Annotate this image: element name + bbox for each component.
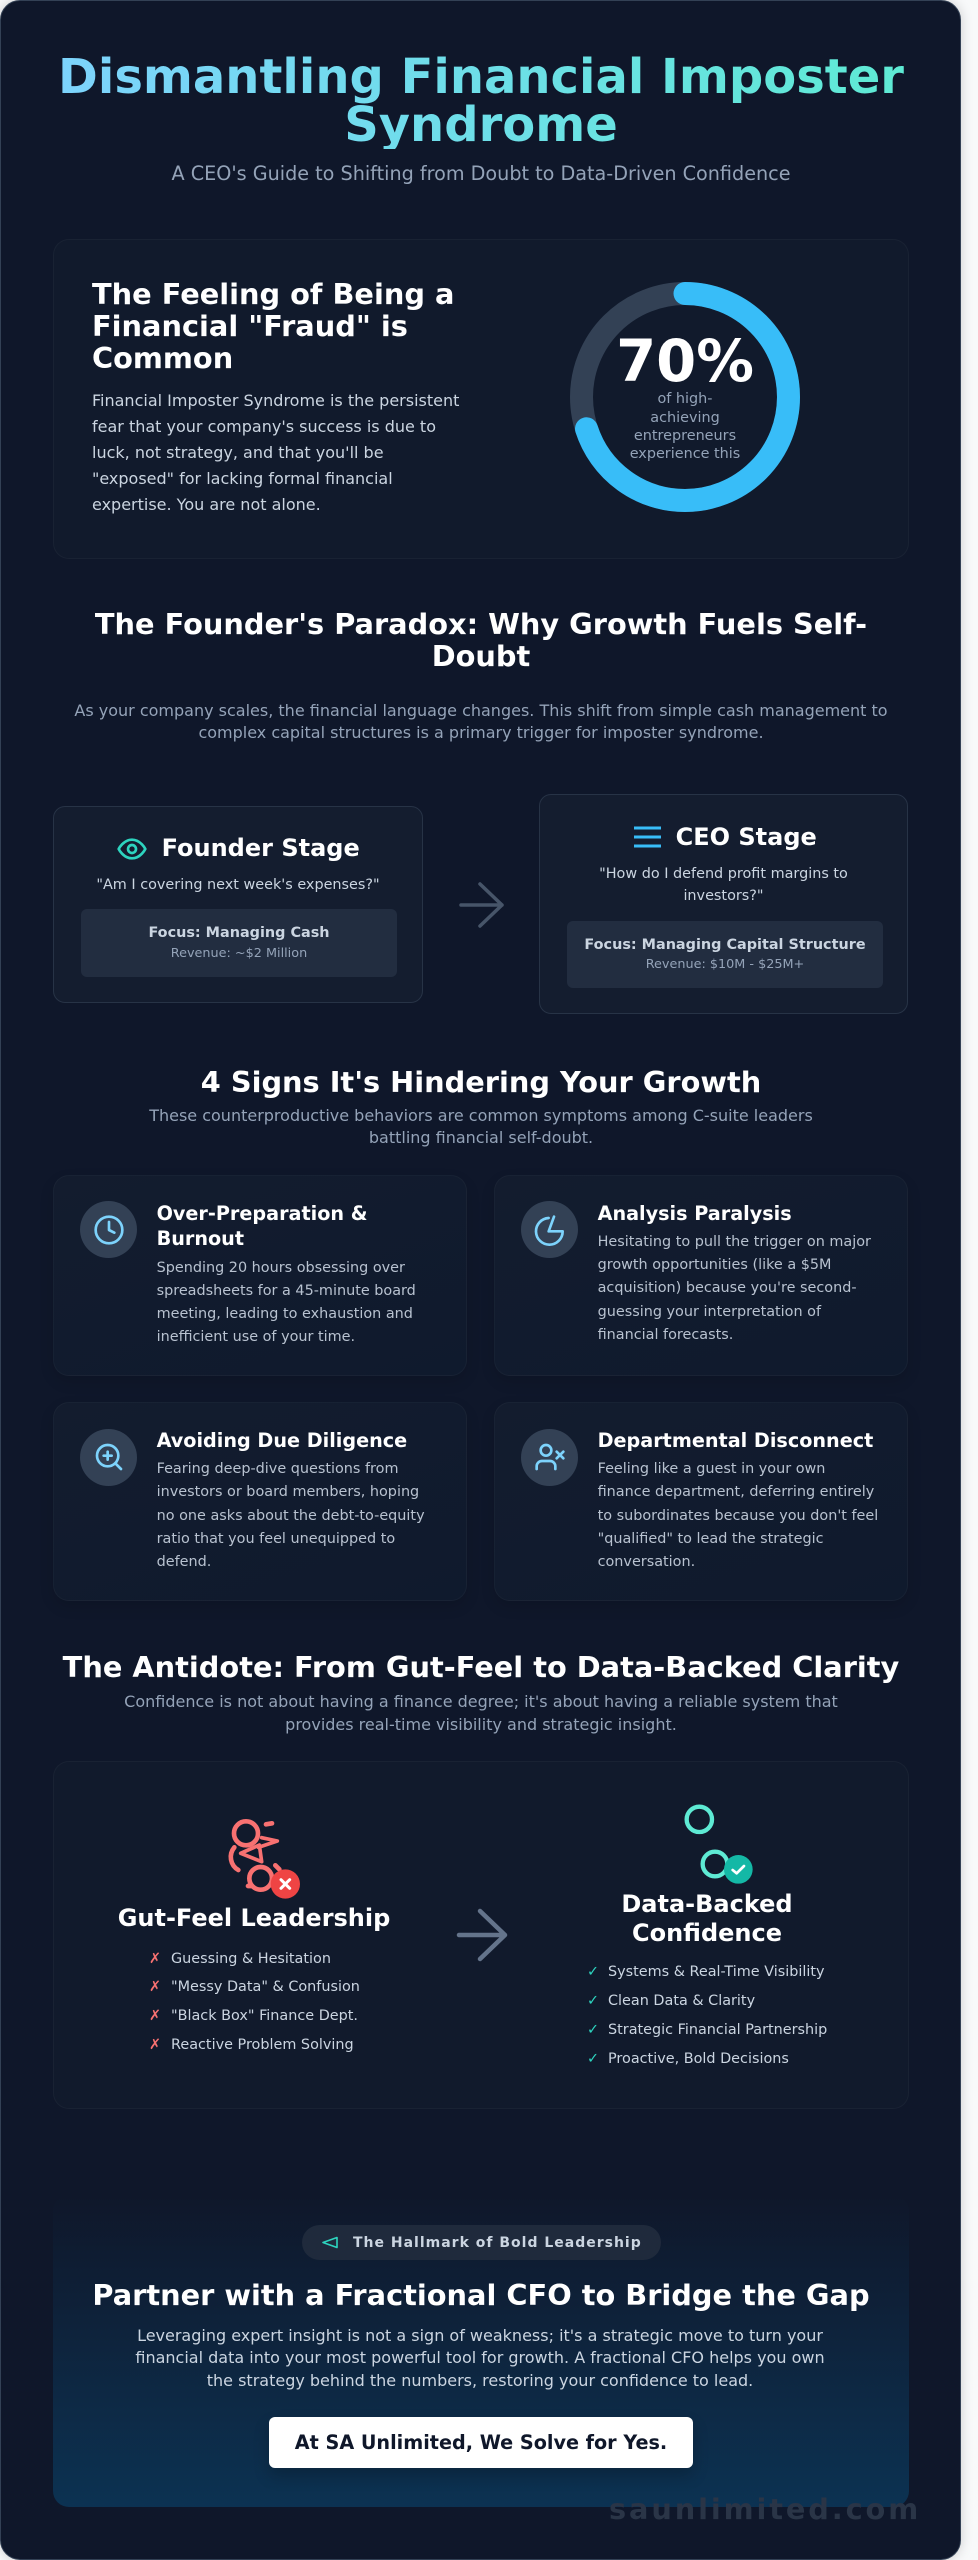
cta text: financial data into your most powerful tool for growth. A fractional CFO helps you own (135, 2348, 825, 2367)
badge (302, 2225, 661, 2260)
card title: Analysis Paralysis (598, 1202, 792, 1225)
card title (157, 1202, 368, 1250)
cta heading: Partner with a Fractional CFO to Bridge the Gap (92, 2278, 870, 2312)
card text (157, 1461, 425, 1570)
icon: eye (117, 838, 147, 860)
title (53, 53, 909, 149)
heading: the founder's paradox: The Founder's Paradox: Why Growth Fuels Self- (95, 607, 867, 641)
card text: growth opportunities (like a $5M (598, 1257, 831, 1273)
watermark: saunlimited.com (609, 2492, 921, 2526)
data-backed list: Systems & Real-Time Visibility (608, 1964, 825, 1980)
section intro: paradox: As your company scales, the financial language changes. This shift from simple cash management to (74, 701, 888, 720)
description text: Financial Imposter Syndrome is the persistent (92, 391, 459, 410)
card text: ratio that you feel unequipped to (157, 1531, 395, 1547)
card text (598, 1461, 878, 1570)
section intro: antidote: Confidence is not about having a finance degree; it's about having a reliable system that (124, 1692, 838, 1711)
heading: Financial "Fraud" is (92, 309, 408, 343)
card text: Feeling like a guest in your own (598, 1461, 825, 1477)
panel: founder stage (53, 806, 423, 1003)
cta text: Leveraging expert insight is not a sign of weakness; it's a strategic move to turn your (137, 2326, 823, 2345)
focus label: Focus: Managing Cash (148, 925, 330, 941)
description text: "exposed" for lacking formal financial (92, 469, 393, 488)
focus label: Focus: Managing Capital Structure (584, 937, 866, 953)
cta text (135, 2326, 825, 2390)
stat caption: of high- (657, 391, 712, 407)
ceo quote: investors?" (683, 888, 764, 904)
section intro: paradox (74, 701, 888, 742)
card text (157, 1260, 416, 1345)
heading: the antidote: The Antidote: From Gut-Feel to Data-Backed Clarity (63, 1650, 899, 1684)
card text (598, 1234, 871, 1343)
gut-feel list: Reactive Problem Solving (171, 2037, 354, 2053)
description text (92, 391, 459, 514)
card text: defend. (157, 1554, 211, 1570)
card text: finance department, deferring entirely (598, 1484, 874, 1500)
gut-feel list: Guessing & Hesitation (171, 1951, 331, 1967)
gut-feel list: "Black Box" Finance Dept. (171, 2008, 358, 2024)
card text: guessing your interpretation of (598, 1304, 821, 1320)
gut-feel heading: Gut-Feel Leadership (118, 1904, 390, 1932)
section intro: paradox: complex capital structures is a primary trigger for imposter syndrome. (198, 723, 764, 742)
card title: Avoiding Due Diligence (157, 1429, 407, 1452)
card text: to subordinates because you don't feel (598, 1508, 878, 1524)
stage name: CEO Stage (676, 823, 817, 851)
card text: inefficient use of your time. (157, 1329, 355, 1345)
cta button (269, 2417, 693, 2468)
heading: Common (92, 341, 233, 375)
panel: comparison (53, 1761, 909, 2109)
panel: ceo stage (539, 794, 908, 1014)
revenue label: Revenue: $10M - $25M+ (646, 957, 804, 972)
gut-feel list: "Messy Data" & Confusion (171, 1979, 360, 1995)
panel: the feeling of being a fraud (53, 239, 909, 559)
stat caption: experience this (630, 446, 740, 462)
card: departmental disconnect (494, 1402, 908, 1601)
icon: broken network with x badge (228, 1819, 300, 1899)
card text: conversation. (598, 1554, 695, 1570)
data-backed heading: Data-Backed (621, 1890, 793, 1918)
card text: acquisition) because you're second- (598, 1280, 857, 1296)
data-backed list (587, 1964, 827, 2067)
badge text: The Hallmark of Bold Leadership (353, 2234, 642, 2250)
subtitle: A CEO's Guide to Shifting from Doubt to Data-Driven Confidence (171, 162, 791, 185)
title: Syndrome (344, 97, 618, 153)
data-backed list: ✓ (587, 1993, 599, 2009)
stat caption: entrepreneurs (634, 428, 736, 444)
card: avoiding due diligence (53, 1402, 467, 1601)
data-backed list: Clean Data & Clarity (608, 1993, 755, 2009)
cta text: the strategy behind the numbers, restoring your confidence to lead. (207, 2371, 753, 2390)
card text: Spending 20 hours obsessing over (157, 1260, 405, 1276)
donut chart: 70 percent (570, 282, 800, 512)
heading: the founder's paradox: Doubt (432, 639, 530, 673)
section intro: signs: These counterproductive behaviors are common symptoms among C-suite leaders (149, 1106, 813, 1125)
card text: Fearing deep-dive questions from (157, 1461, 398, 1477)
description text: luck, not strategy, and that you'll be (92, 443, 384, 462)
heading: 4 signs: 4 Signs It's Hindering Your Growth (201, 1065, 761, 1099)
founder quote: "Am I covering next week's expenses?" (96, 877, 380, 893)
card text: Hesitating to pull the trigger on major (598, 1234, 871, 1250)
data-backed list: Strategic Financial Partnership (608, 2022, 827, 2038)
heading: The Feeling of Being a (92, 277, 454, 311)
ceo quote: "How do I defend profit margins to (599, 866, 848, 882)
card text: meeting, leading to exhaustion and (157, 1306, 413, 1322)
cta button: At SA Unlimited, We Solve for Yes. (295, 2431, 667, 2454)
icon: menu lines (634, 826, 661, 848)
card text: financial forecasts. (598, 1327, 733, 1343)
section intro: signs: battling financial self-doubt. (369, 1128, 593, 1147)
revenue label: Revenue: ~$2 Million (171, 946, 307, 961)
ceo quote (599, 866, 848, 904)
card text: investors or board members, hoping (157, 1484, 419, 1500)
data-backed heading (621, 1890, 793, 1947)
focus box (81, 909, 397, 977)
stat caption (630, 391, 740, 462)
section intro: antidote: provides real-time visibility and strategic insight. (285, 1715, 677, 1734)
data-backed heading: Confidence (632, 1919, 782, 1947)
icon: megaphone (322, 2236, 338, 2248)
gut-feel list (149, 1951, 360, 2053)
icon: magnifier (80, 1428, 137, 1486)
title: Dismantling Financial Imposter (58, 49, 904, 105)
card: analysis paralysis (494, 1175, 908, 1376)
description text: fear that your company's success is due to (92, 417, 436, 436)
heading: the founder's paradox (95, 607, 867, 673)
arrow: founder to ceo (459, 882, 504, 928)
card text: no one asks about the debt-to-equity (157, 1508, 425, 1524)
stat caption: achieving (650, 410, 720, 426)
data-backed list: ✓ (587, 1964, 599, 1980)
section intro: antidote (124, 1692, 838, 1734)
card text: spreadsheets for a 45-minute board (157, 1283, 416, 1299)
stat: 70%: 70% (616, 328, 754, 395)
arrow: gut-feel to data-backed (456, 1908, 508, 1962)
heading (92, 277, 454, 375)
card title: Departmental Disconnect (598, 1429, 873, 1452)
focus box (567, 921, 883, 988)
card title: Burnout (157, 1227, 244, 1250)
panel: call to action (53, 2195, 909, 2507)
stage name: Founder Stage (162, 834, 360, 862)
data-backed list: ✓ (587, 2022, 599, 2038)
data-backed list: Proactive, Bold Decisions (608, 2051, 789, 2067)
card: over-preparation (53, 1175, 467, 1376)
icon: clock (80, 1201, 137, 1258)
data-backed list: ✓ (587, 2051, 599, 2067)
gut-feel list: ✗ (149, 1979, 161, 1995)
card title: Over-Preparation & (157, 1202, 368, 1225)
card text: "qualified" to lead the strategic (598, 1531, 824, 1547)
gut-feel list: ✗ (149, 2008, 161, 2024)
gut-feel list: ✗ (149, 2037, 161, 2053)
icon: user with x (521, 1428, 578, 1486)
description text: expertise. You are not alone. (92, 495, 321, 514)
icon: connected circles with check badge (684, 1804, 753, 1884)
icon: pie chart (521, 1201, 578, 1258)
gut-feel list: ✗ (149, 1951, 161, 1967)
section intro: signs (149, 1106, 813, 1147)
